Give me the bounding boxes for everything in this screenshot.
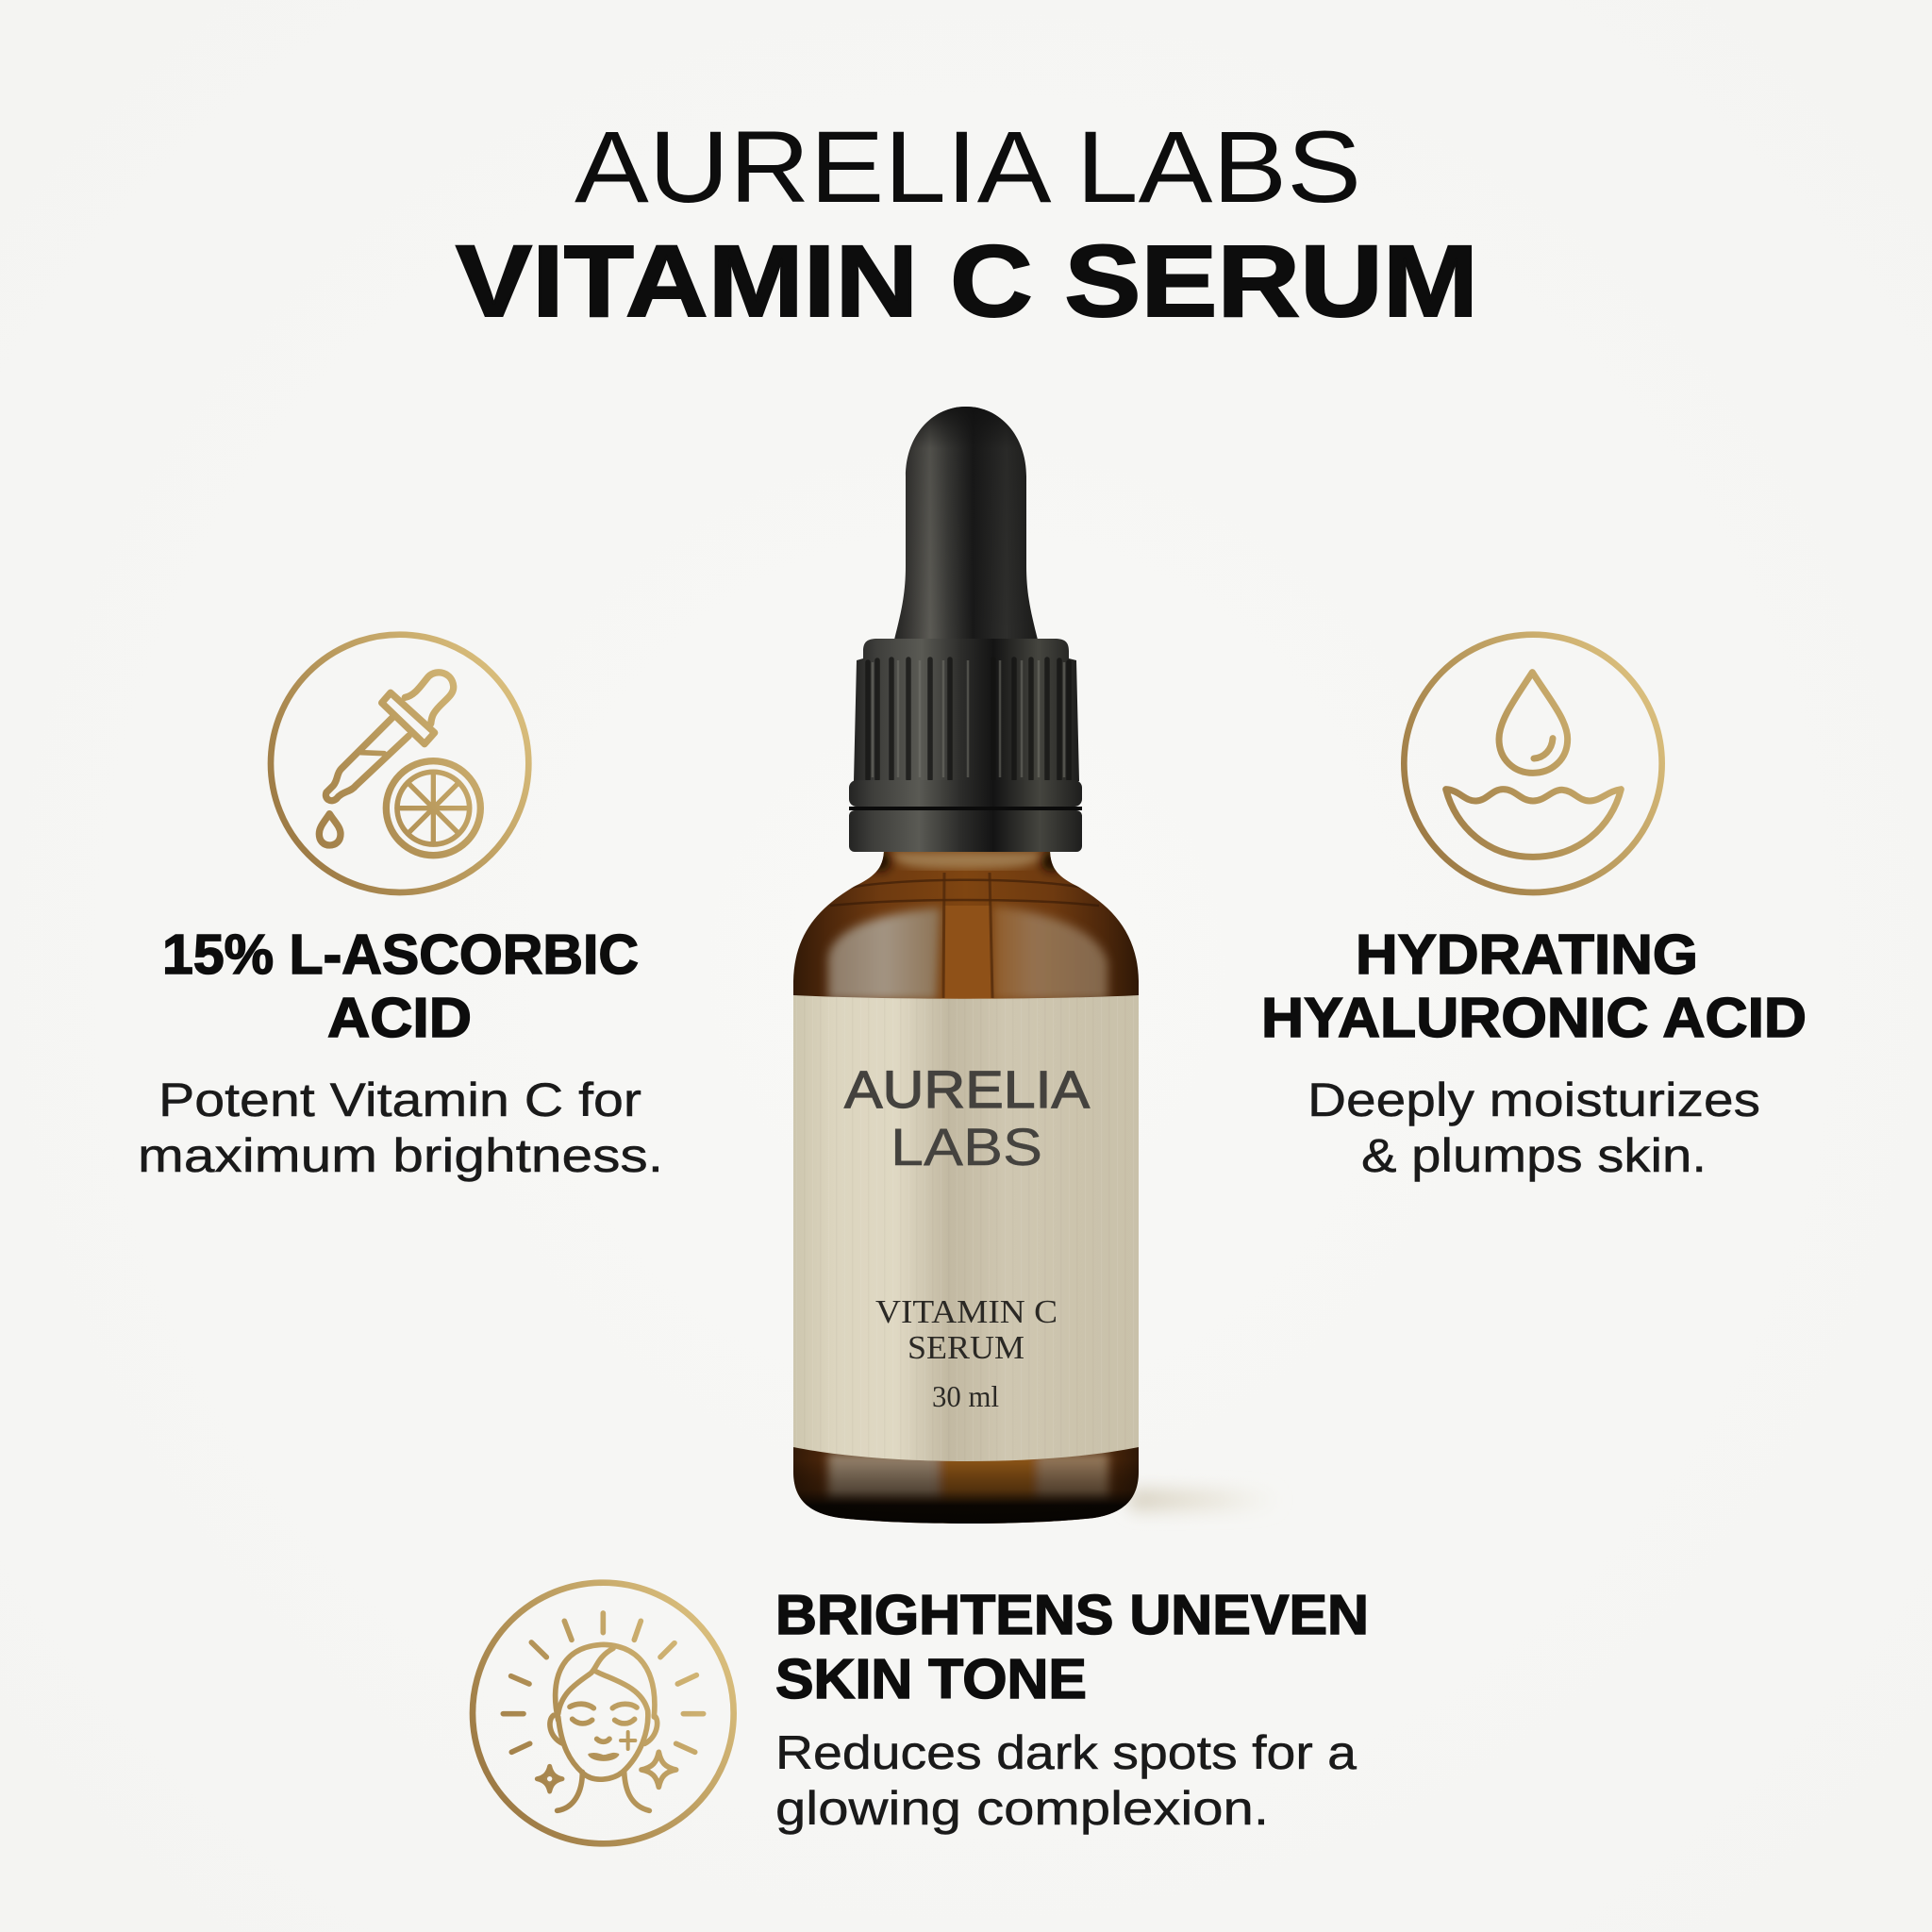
heading: HYALURONIC ACID (1261, 987, 1807, 1049)
heading: HYDRATING (1356, 924, 1698, 986)
glass base (793, 1464, 1139, 1524)
feature: brightens skin tone (473, 1583, 1369, 1843)
title (456, 109, 1478, 338)
heading: 15% L-ASCORBIC (162, 924, 639, 986)
dropper cap (849, 639, 1082, 852)
description: & plumps skin. (1361, 1129, 1707, 1182)
small sparkle centre (547, 1776, 552, 1781)
label product: VITAMIN C (875, 1293, 1058, 1330)
heading: SKIN TONE (775, 1648, 1087, 1710)
description: glowing complexion. (775, 1782, 1269, 1835)
label volume: 30 ml (932, 1379, 999, 1413)
description: Potent Vitamin C for (158, 1074, 641, 1126)
description (1307, 1074, 1760, 1182)
icon: dropper with citrus slice (271, 635, 528, 892)
bottle shadow (1127, 1489, 1283, 1511)
description (775, 1726, 1357, 1835)
glass highlights (783, 851, 1149, 1533)
amber glass body (793, 849, 1139, 1524)
description (138, 1074, 663, 1182)
heading: ACID (327, 987, 472, 1049)
feature: L-ascorbic acid (138, 635, 663, 1182)
heading (162, 924, 639, 1049)
label (793, 995, 1139, 1461)
feature: hyaluronic acid (1261, 635, 1807, 1182)
heading (1261, 924, 1807, 1049)
icon: glowing face (473, 1583, 734, 1843)
description: Reduces dark spots for a (775, 1726, 1357, 1779)
label product second line: SERUM (908, 1329, 1024, 1366)
product bottle (783, 407, 1283, 1533)
title line: product: VITAMIN C SERUM (456, 224, 1478, 338)
heading (775, 1584, 1369, 1710)
description: maximum brightness. (138, 1129, 663, 1182)
label brand second line: LABS (891, 1117, 1042, 1176)
title line: brand: AURELIA LABS (575, 109, 1361, 224)
description: Deeply moisturizes (1307, 1074, 1760, 1126)
icon: water drop over bowl (1404, 635, 1662, 892)
heading: BRIGHTENS UNEVEN (775, 1584, 1369, 1646)
dropper rubber bulb (894, 407, 1038, 640)
label brand: AURELIA (844, 1059, 1091, 1119)
